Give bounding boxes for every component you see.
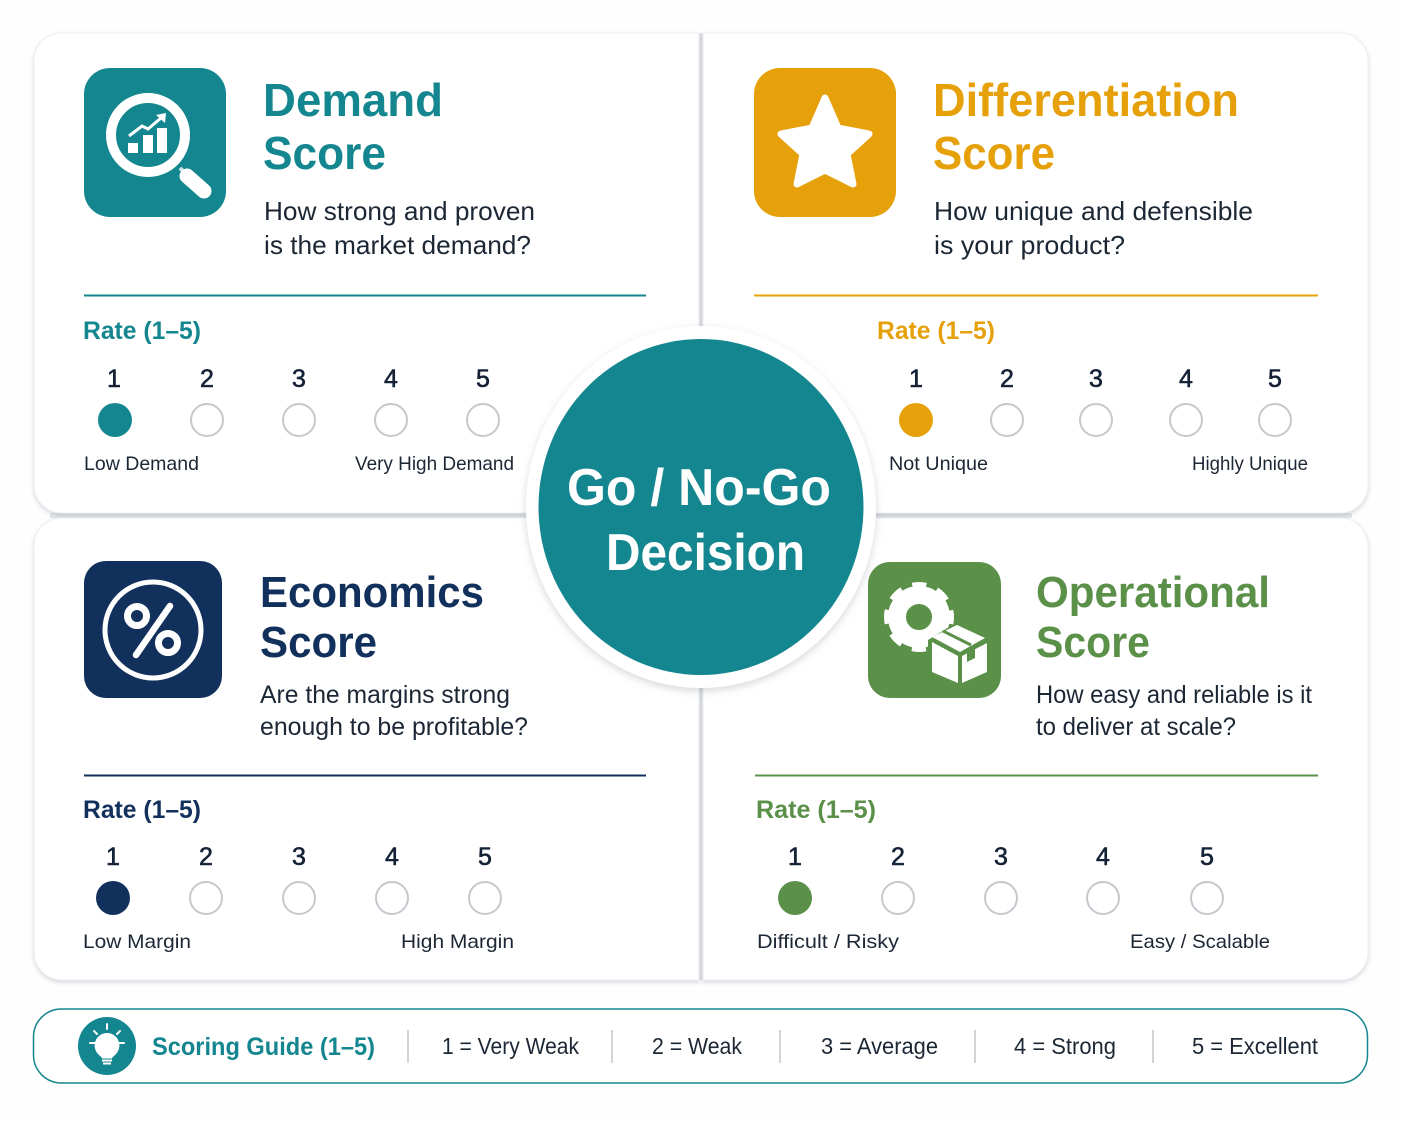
economics heading: Score (260, 618, 377, 667)
panel: operational score (703, 518, 1368, 980)
differentiation rating scale: 5 (1268, 365, 1282, 393)
demand rating scale: 1 (107, 365, 121, 393)
demand rating scale: Rate (1–5) (83, 317, 201, 345)
operational rule (755, 774, 1318, 776)
operational rating scale: Easy / Scalable (1130, 931, 1270, 953)
demand rating scale (83, 317, 514, 475)
center decision circle (526, 326, 876, 688)
decision label: Decision (606, 524, 805, 582)
differentiation rating scale: Highly Unique (1192, 453, 1308, 475)
differentiation heading (933, 74, 1239, 179)
scoring guide levels: 4 = Strong (1014, 1033, 1116, 1059)
differentiation rating scale: 4 (1179, 365, 1193, 393)
operational heading: Score (1036, 618, 1150, 667)
differentiation rating scale (877, 317, 1308, 475)
demand rating scale: Very High Demand (355, 453, 514, 475)
demand question: is the market demand? (264, 230, 531, 260)
icon: gear and box (868, 562, 1001, 698)
operational heading: Operational (1036, 568, 1270, 617)
demand rating scale: 4 (384, 365, 398, 393)
differentiation question: How unique and defensible (934, 196, 1253, 226)
operational question: How easy and reliable is it (1036, 681, 1312, 709)
differentiation rating scale: Not Unique (889, 453, 988, 475)
demand heading (263, 74, 443, 179)
economics rating scale: Rate (1–5) (83, 796, 201, 824)
operational rating scale: Rate (1–5) (756, 796, 876, 824)
economics rating scale: 3 (292, 843, 306, 871)
icon: magnifier with growth chart (84, 68, 226, 217)
scoring guide levels: 2 = Weak (652, 1033, 742, 1059)
icon: star (754, 68, 896, 217)
economics rating scale: Low Margin (83, 931, 191, 953)
differentiation heading: Differentiation (933, 74, 1239, 126)
differentiation rating scale: 1 (909, 365, 923, 393)
demand heading: Demand (263, 74, 443, 126)
panel: economics score (34, 518, 699, 980)
economics question (260, 681, 528, 741)
economics heading (260, 568, 484, 667)
scoring guide levels: 1 = Very Weak (442, 1033, 579, 1059)
economics rating scale: 5 (478, 843, 492, 871)
differentiation rating scale: 2 (1000, 365, 1014, 393)
demand rating scale: 2 (200, 365, 214, 393)
demand rating scale: Low Demand (84, 453, 199, 475)
economics rating scale (83, 796, 514, 953)
economics rating scale: 1 (106, 843, 120, 871)
gutter between cards (50, 33, 1352, 980)
panel: demand score (34, 33, 699, 513)
economics heading: Economics (260, 568, 484, 617)
operational rating scale: 1 (788, 843, 802, 871)
demand card background (34, 33, 699, 513)
decision label (567, 459, 831, 582)
icon: percent (84, 561, 222, 698)
scoring guide levels: 3 = Average (821, 1033, 938, 1059)
demand heading: Score (263, 127, 386, 179)
economics question: Are the margins strong (260, 681, 510, 709)
differentiation rating scale: Rate (1–5) (877, 317, 995, 345)
operational rating scale: 3 (994, 843, 1008, 871)
scoring guide bar (34, 1009, 1368, 1083)
scoring guide levels: 5 = Excellent (1192, 1033, 1319, 1059)
demand rating scale: 3 (292, 365, 306, 393)
operational rating scale: 2 (891, 843, 905, 871)
economics rating scale: 4 (385, 843, 399, 871)
economics question: enough to be profitable? (260, 713, 528, 741)
demand rating scale: 5 (476, 365, 490, 393)
scoring guide title: Scoring Guide (1–5) (152, 1033, 375, 1061)
operational rating scale: Difficult / Risky (757, 931, 899, 953)
operational rating scale (756, 796, 1270, 953)
operational heading (1036, 568, 1270, 667)
operational question (1036, 681, 1312, 741)
demand question: How strong and proven (264, 196, 535, 226)
differentiation question: is your product? (934, 230, 1125, 260)
operational rating scale: 5 (1200, 843, 1214, 871)
demand question (264, 196, 535, 260)
differentiation rating scale: 3 (1089, 365, 1103, 393)
economics rating scale: High Margin (401, 931, 514, 953)
scoring guide levels (442, 1033, 1319, 1059)
operational rating scale: 4 (1096, 843, 1110, 871)
economics rating scale: 2 (199, 843, 213, 871)
operational question: to deliver at scale? (1036, 713, 1236, 741)
operational card background (703, 518, 1368, 980)
differentiation heading: Score (933, 127, 1055, 179)
icon: light bulb (78, 1017, 136, 1075)
differentiation card background (703, 33, 1368, 513)
panel: differentiation score (703, 33, 1368, 513)
decision label: Go / No-Go (567, 459, 831, 517)
economics card background (34, 518, 699, 980)
differentiation question (934, 196, 1253, 260)
